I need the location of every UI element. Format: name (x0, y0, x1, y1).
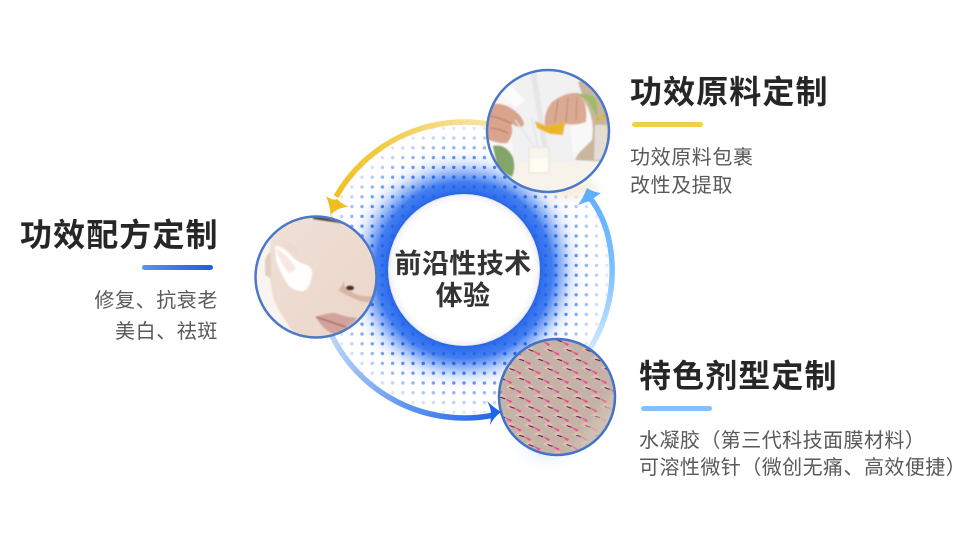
text: ingredient (630, 147, 754, 197)
text: ingredient: 功效原料包裹 (630, 147, 754, 169)
bar: dosage (641, 406, 712, 411)
blue glow under patch (522, 404, 574, 456)
centre title: 前沿性技术 (394, 249, 532, 279)
photo: microneedle patch (499, 339, 620, 458)
cream tint below lab photo (542, 177, 598, 199)
text: formula: 修复、抗衰老 (94, 290, 218, 312)
centre circle (387, 193, 541, 347)
photo: face with cream (254, 215, 378, 340)
text: dosage: 水凝胶（第三代科技面膜材料） (639, 430, 925, 452)
heading: formula: 功效配方定制 (20, 217, 219, 253)
text: ingredient: 改性及提取 (630, 175, 733, 197)
bar: ingredient (632, 122, 703, 127)
arc: blue arrow (330, 332, 501, 425)
text: formula: 美白、祛斑 (115, 321, 218, 343)
heading: ingredient: 功效原料定制 (630, 74, 829, 110)
text: formula (94, 290, 218, 343)
bar: formula (142, 265, 213, 270)
photo: lab ingredients (484, 68, 612, 196)
centre circle: 体验 (436, 281, 490, 311)
heading: dosage: 特色剂型定制 (639, 358, 838, 394)
blue glow (334, 140, 594, 400)
text: dosage (639, 430, 960, 479)
arc: yellow arrow (326, 122, 490, 215)
text: dosage: 可溶性微针（微创无痛、高效便捷） (639, 457, 960, 479)
arc: light blue arrow (578, 188, 612, 352)
central diagram (254, 68, 616, 462)
dot halftone (318, 124, 610, 416)
